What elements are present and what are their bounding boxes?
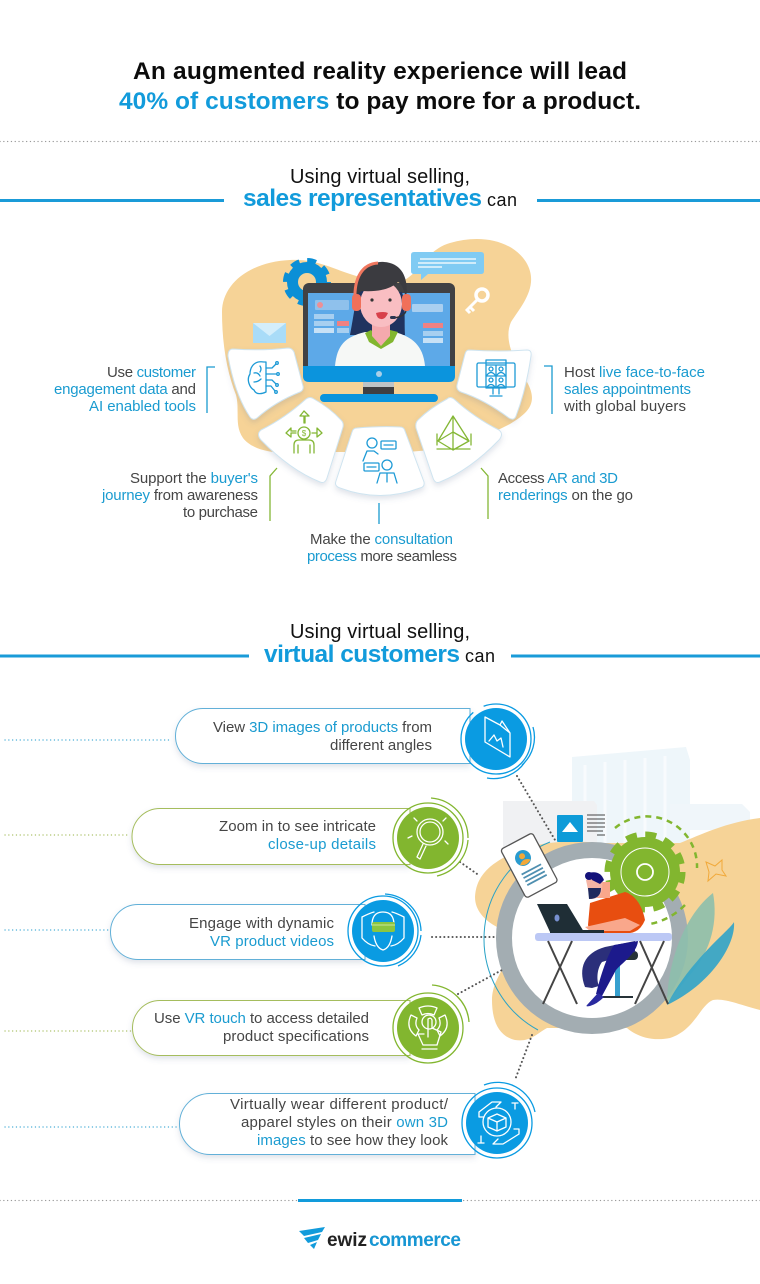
text: AR and 3D (481, 468, 633, 519)
pill text: different angles (330, 737, 432, 754)
heading: virtual customers (0, 621, 760, 668)
title: An augmented reality experience will lead (133, 58, 627, 85)
title (119, 58, 641, 115)
logo mark (299, 1227, 325, 1249)
text: AR and 3D: Access AR and 3D (498, 470, 618, 487)
text: consultation: process more seamless (307, 548, 457, 565)
illustration: customer at desk (475, 747, 760, 1040)
card: buyer journey (258, 398, 343, 482)
speech bubble (411, 252, 484, 280)
logo: ewizcommerce: ewiz (327, 1230, 367, 1251)
icon: 3D box in hands (462, 1082, 535, 1158)
text: buyer journey: to purchase (183, 504, 258, 521)
pill text (189, 915, 334, 950)
phone (500, 833, 558, 898)
card: consultation (336, 427, 424, 496)
grey ring (504, 850, 680, 1026)
woman with headset (335, 262, 425, 366)
card: live appointments (457, 350, 531, 419)
text: live appointments: sales appointments (564, 381, 691, 398)
pill: own 3D images (179, 1082, 535, 1158)
card: 3D rendering (416, 398, 502, 482)
icon: VR touch (393, 985, 469, 1063)
text: customer engagement (54, 364, 215, 415)
faint buildings (503, 747, 750, 850)
leaves (667, 893, 734, 1005)
text: customer engagement: Use customer (107, 364, 196, 381)
pill: VR video (110, 894, 421, 966)
text: customer engagement: engagement data and (54, 381, 196, 398)
pill text: apparel styles on their own 3D (241, 1114, 448, 1131)
text: customer engagement: AI enabled tools (89, 398, 196, 415)
illustration: sales representative (222, 239, 532, 495)
icon: 3D image file (461, 704, 534, 779)
text: consultation (307, 503, 457, 565)
text: live appointments (544, 364, 705, 415)
text: live appointments: Host live face-to-face (564, 364, 705, 381)
title: 40% of customers to pay more for a product. (119, 88, 641, 115)
dotted connectors (432, 776, 555, 1080)
heading: sales representatives: Using virtual selling, (290, 166, 470, 188)
icon: key (466, 289, 488, 313)
heading: virtual customers: virtual customers (264, 641, 460, 668)
monitor (303, 283, 455, 402)
text: buyer journey: journey from awareness (101, 487, 258, 504)
pill text: Engage with dynamic (189, 915, 334, 932)
pill text (213, 719, 432, 754)
icon: dollar arrows: $ (302, 429, 307, 438)
pill text: close-up details (268, 836, 376, 853)
icon: magnifier (393, 798, 468, 876)
floating card (557, 815, 605, 842)
pill text: Use VR touch to access detailed (154, 1010, 369, 1027)
icon: AI brain (248, 362, 279, 394)
heading: virtual customers: Using virtual selling, (290, 621, 470, 643)
icon: consultation (363, 438, 397, 483)
pill text (219, 818, 376, 853)
pill text: View 3D images of products from (213, 719, 432, 736)
icon: envelope (253, 323, 286, 343)
peach blob (475, 818, 760, 1040)
pill: VR touch (132, 985, 469, 1063)
blue arc (484, 842, 550, 1030)
pill text: Zoom in to see intricate (219, 818, 376, 835)
icon: star (706, 860, 726, 881)
heading: sales representatives: can (487, 190, 517, 210)
heading: virtual customers: can (465, 646, 495, 666)
pill text (154, 1010, 369, 1045)
text: consultation: Make the consultation (310, 531, 453, 548)
peach blob (222, 239, 532, 453)
icon: AR pyramid (437, 416, 471, 450)
heading: sales representatives (0, 166, 760, 212)
pill text (230, 1096, 449, 1149)
heading: sales representatives: sales representatives (243, 185, 482, 212)
text: live appointments: with global buyers (563, 398, 686, 415)
card: brain (228, 348, 303, 419)
text: AR and 3D: renderings on the go (498, 487, 633, 504)
man at desk (535, 872, 672, 1006)
pill text: product specifications (223, 1028, 369, 1045)
green gear (608, 816, 697, 924)
logo: ewizcommerce: commerce (369, 1230, 461, 1251)
logo: ewizcommerce (299, 1227, 461, 1251)
icon: blue gear (286, 260, 328, 304)
text: buyer journey (101, 468, 277, 521)
pill text: Virtually wear different product/ (230, 1096, 449, 1113)
pill: 3D images (175, 704, 534, 779)
text: buyer journey: Support the buyer's (130, 470, 258, 487)
icon: VR headset (348, 894, 421, 966)
icon: video call (477, 360, 515, 396)
pill text: VR product videos (210, 933, 334, 950)
pill text: images to see how they look (257, 1132, 448, 1149)
pill: zoom (132, 798, 468, 876)
